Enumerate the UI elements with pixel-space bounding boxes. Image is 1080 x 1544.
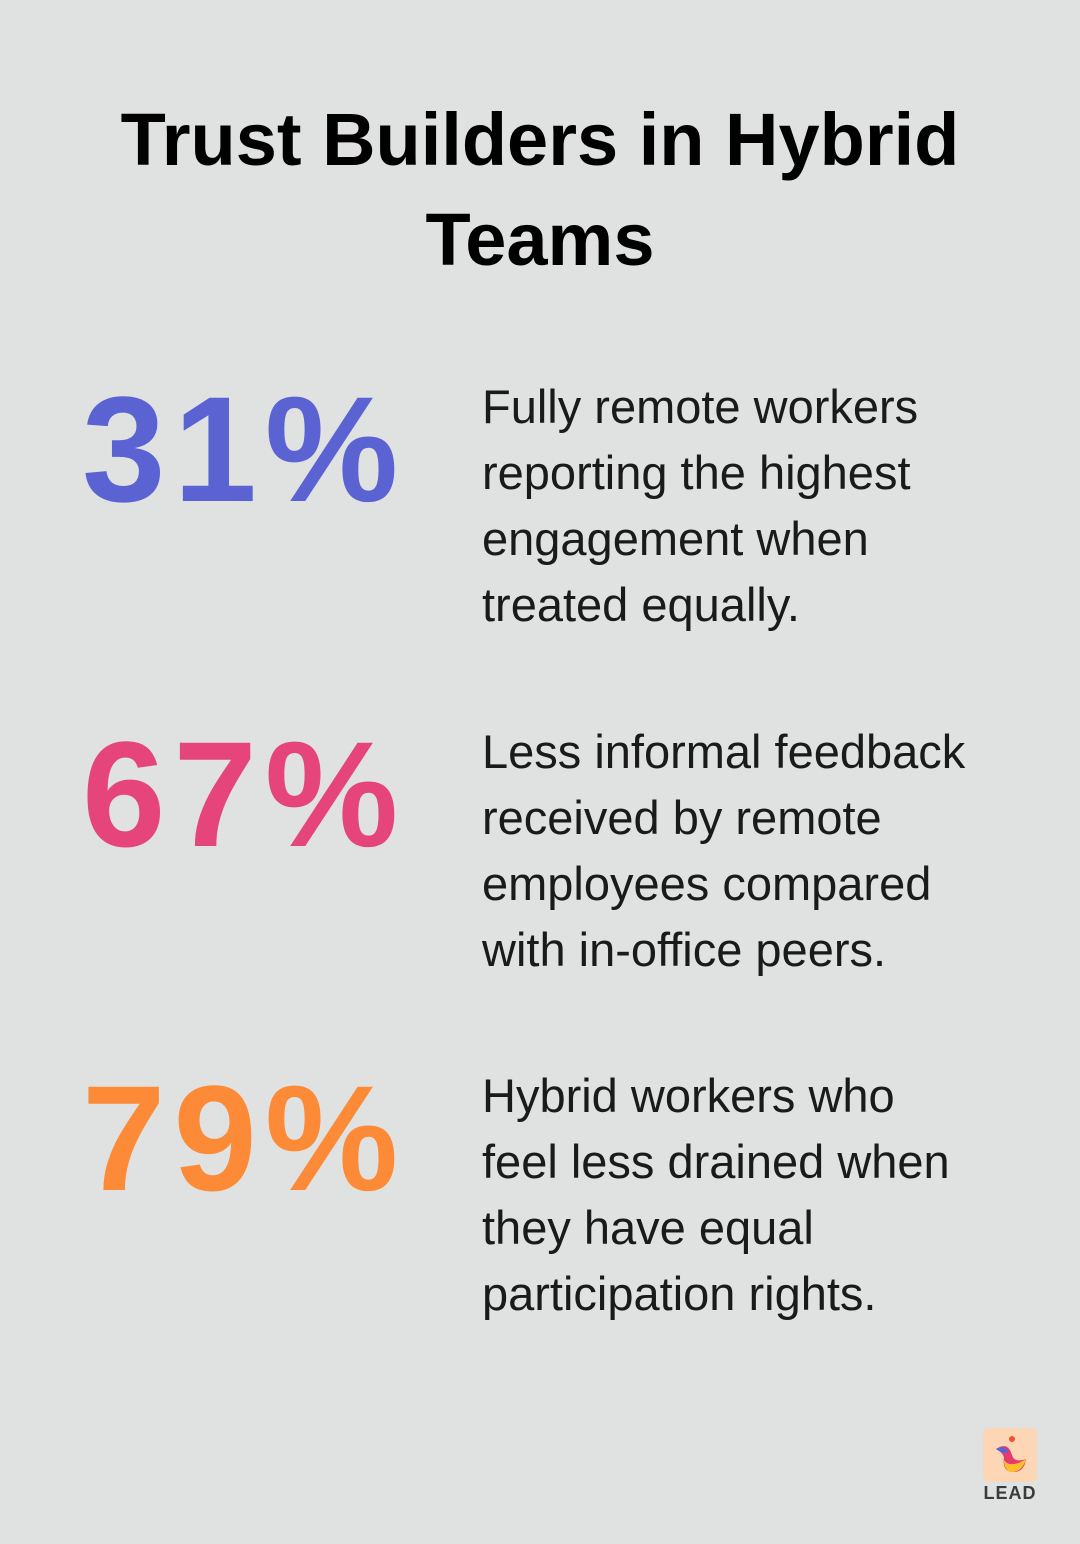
stat number 67%: 67% [82,710,406,878]
stat description 1: reporting the highest [482,446,911,499]
icon: logo mark [983,1428,1037,1482]
stat description 3: Hybrid workers who [482,1069,895,1122]
stat description 2: with in-office peers. [482,923,886,976]
logo [983,1428,1037,1503]
title: Trust Builders in Hybrid [121,98,959,181]
logo text: LEAD [984,1483,1036,1503]
stat number 79%: 79% [82,1054,406,1222]
stat description 3 [482,1069,950,1320]
title [121,98,959,281]
title: Teams [426,198,654,281]
stat description 2 [482,725,966,976]
stat description 2: Less informal feedback [482,725,965,778]
stat description 1: treated equally. [482,578,800,631]
stat description 1: Fully remote workers [482,380,918,433]
stat description 2: received by remote [482,791,882,844]
stat row 1 [82,365,918,631]
stat description 3: feel less drained when [482,1135,950,1188]
stat description 3: they have equal [482,1201,814,1254]
stat description 1: engagement when [482,512,869,565]
stat number 31%: 31% [82,365,406,533]
stat description 1 [482,380,918,631]
stat description 2: employees compared [482,857,931,910]
stat row 2 [82,710,966,976]
stat row 3 [82,1054,950,1320]
stat description 3: participation rights. [482,1267,876,1320]
